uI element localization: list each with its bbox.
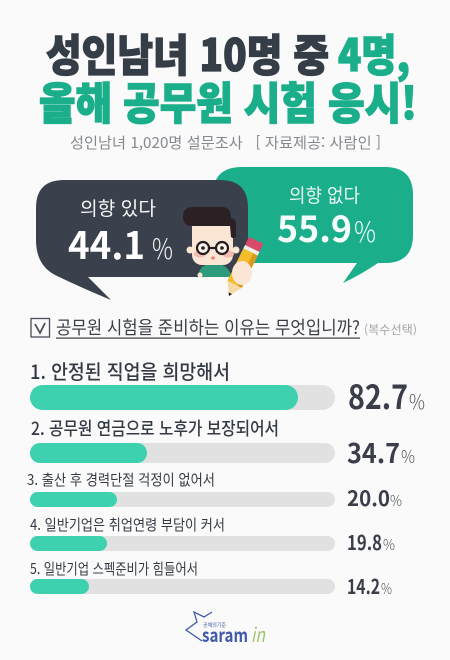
- bar row 1: %: [409, 386, 425, 415]
- hand: [232, 261, 252, 285]
- pencil: [222, 237, 263, 300]
- title: [39, 20, 417, 132]
- bar row 4: 19.8: [347, 527, 382, 556]
- character hair: [183, 207, 236, 238]
- bar row 2: [30, 415, 415, 471]
- bar row 2: %: [401, 443, 415, 469]
- bar row 3: [27, 469, 402, 513]
- bar row 3: 3. 출산 후 경력단절 걱정이 없어서: [27, 469, 215, 490]
- speech bubble: no intention: 의향 없다: [289, 181, 360, 208]
- character body: [198, 264, 232, 277]
- bar row 4: %: [383, 534, 395, 555]
- bar row 5: %: [381, 578, 392, 599]
- question: (복수선택): [364, 321, 417, 338]
- checkbox: [31, 318, 50, 337]
- bar row 1: [30, 356, 425, 419]
- icon: character with pencil: [183, 207, 263, 300]
- logo: saramin: [186, 612, 266, 648]
- character glasses: [197, 242, 228, 254]
- bar row 5: 5. 일반기업 스펙준비가 힘들어서: [30, 558, 198, 579]
- bar row 5: [30, 558, 392, 600]
- speech bubble: no intention: [213, 167, 413, 283]
- bar row 1: 1. 안정된 직업을 희망해서: [30, 356, 230, 385]
- subtitle: 성인남녀 1,020명 설문조사 [ 자료제공: 사람인 ]: [70, 132, 381, 153]
- character face: [186, 246, 194, 254]
- bar row 3: %: [390, 490, 402, 511]
- speech bubble: intention: 의향 있다: [80, 194, 156, 221]
- speech bubble: intention: [36, 180, 248, 300]
- bar row 4: [30, 514, 395, 556]
- bar row 3: 20.0: [347, 483, 390, 513]
- title: 성인남녀 10명 중: [46, 20, 329, 84]
- speech bubble: no intention: 55.9: [277, 201, 352, 253]
- bar row 5: 14.2: [347, 571, 380, 600]
- bar row 1: 82.7: [348, 371, 408, 419]
- title: 올해 공무원 시험 응시!: [39, 68, 417, 132]
- bar row 2: 2. 공무원 연금으로 노후가 보장되어서: [31, 415, 279, 441]
- speech bubble: intention: %: [152, 228, 173, 268]
- bar row 4: 4. 일반기업은 취업연령 부담이 커서: [30, 514, 225, 535]
- question: 공무원 시험을 준비하는 이유는 무엇입니까?: [56, 314, 360, 340]
- title: 4명,: [338, 20, 410, 84]
- logo: saramin: 공채의기준: [203, 621, 226, 629]
- bar row 2: 34.7: [347, 432, 400, 471]
- speech bubble: no intention: %: [354, 211, 376, 251]
- speech bubble: intention: 44.1: [68, 215, 145, 270]
- logo: saramin: in: [251, 619, 266, 648]
- logo: saramin: saram: [202, 621, 248, 648]
